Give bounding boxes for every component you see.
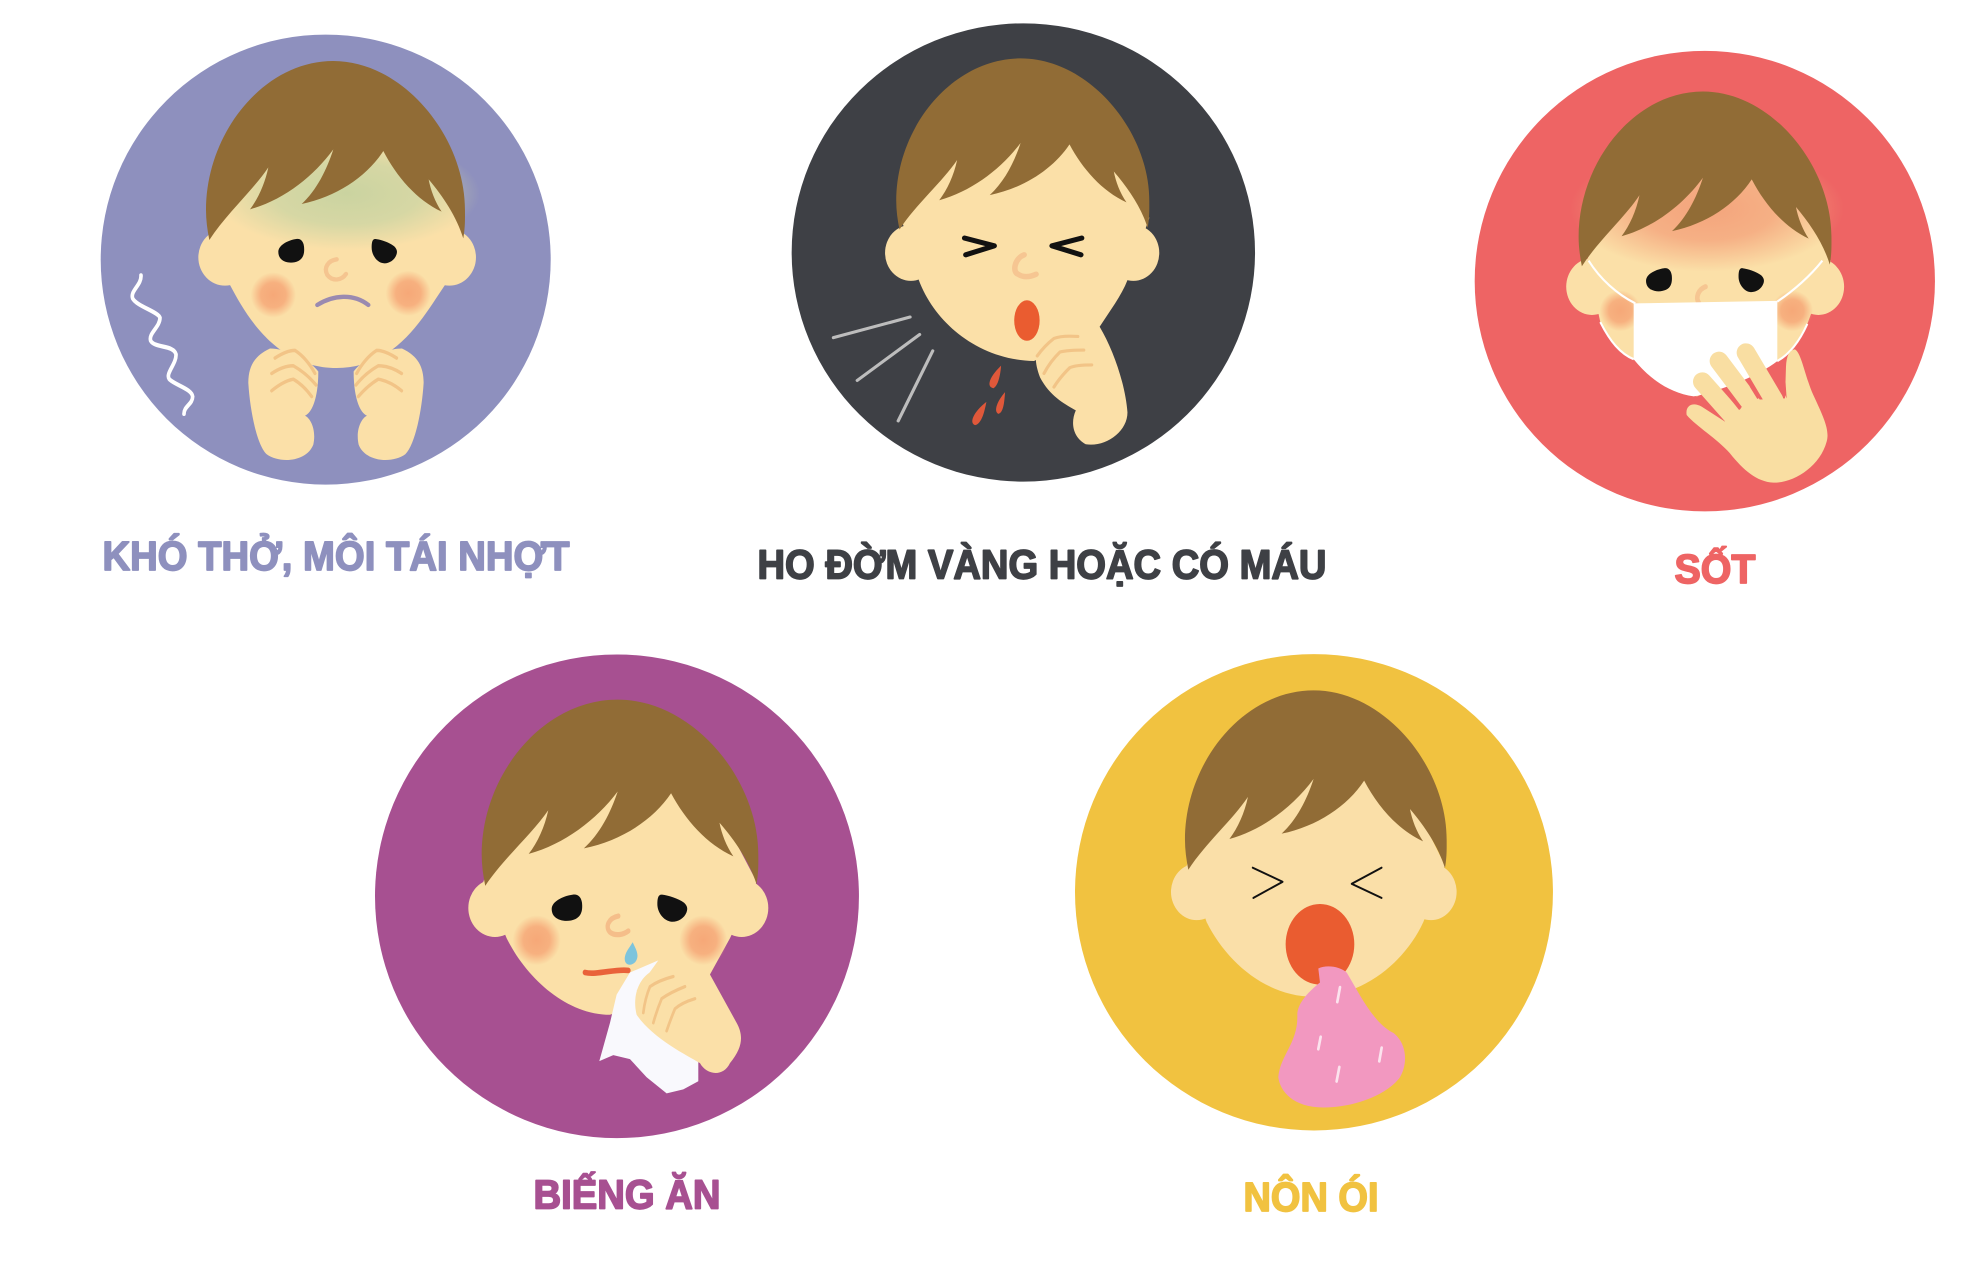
label: HO ĐỜM VÀNG HOẶC CÓ MÁU xyxy=(758,542,1326,588)
label: NÔN ÓI xyxy=(1244,1174,1378,1220)
magenta circle xyxy=(375,655,859,1138)
panel: ho đờm vàng hoặc có máu xyxy=(758,23,1326,587)
cheeks xyxy=(1600,290,1813,331)
hair xyxy=(206,61,465,240)
finger lines xyxy=(643,977,695,1031)
hands and shiver of boy short of breath xyxy=(132,275,424,460)
eyes xyxy=(552,895,687,922)
mask straps xyxy=(1589,261,1822,361)
mouth xyxy=(317,297,368,305)
hair xyxy=(1579,91,1831,266)
fingers xyxy=(1702,353,1774,417)
left hand xyxy=(248,348,318,460)
panel: khó thở, môi tái nhợt xyxy=(101,35,570,579)
panel: nôn ói xyxy=(1075,654,1553,1220)
cheeks xyxy=(251,271,431,318)
eyes xyxy=(278,239,397,263)
label: SỐT xyxy=(1674,546,1756,592)
panel: sốt xyxy=(1475,51,1935,592)
palm xyxy=(1686,349,1828,483)
mouth xyxy=(1014,300,1040,341)
finger gaps xyxy=(1729,386,1758,409)
tissue xyxy=(599,960,698,1093)
blood drops xyxy=(972,366,1005,425)
squeezed eyes xyxy=(965,238,1082,255)
open mouth xyxy=(1286,904,1354,985)
ears xyxy=(468,879,768,937)
ears xyxy=(1171,864,1457,920)
face xyxy=(1587,142,1831,396)
illustration: boy with runny nose xyxy=(375,655,859,1138)
red circle xyxy=(1475,51,1935,511)
illustration: boy coughing xyxy=(792,23,1255,482)
face xyxy=(483,761,757,1015)
nose xyxy=(608,916,628,935)
pale green forehead xyxy=(213,137,480,250)
nose xyxy=(1697,287,1705,303)
shiver line xyxy=(132,275,193,414)
illustration: boy with fever and mask xyxy=(1475,51,1935,511)
snot drop xyxy=(625,942,637,965)
gap beside thumb xyxy=(1773,365,1787,398)
finger lines xyxy=(272,350,402,397)
face xyxy=(210,117,465,368)
cough lines xyxy=(833,317,933,421)
nose xyxy=(326,259,346,280)
dark circle xyxy=(792,23,1255,482)
hair xyxy=(482,700,758,886)
label: BIẾNG ĂN xyxy=(534,1172,720,1218)
right hand xyxy=(354,348,424,460)
vomit xyxy=(1278,966,1405,1107)
cheeks xyxy=(513,915,727,965)
hand xyxy=(1036,327,1127,445)
ears xyxy=(885,225,1159,281)
purple circle xyxy=(101,35,551,485)
hand xyxy=(1686,349,1828,483)
head of boy short of breath xyxy=(198,117,480,368)
face xyxy=(899,117,1149,361)
vomit highlights xyxy=(1318,987,1382,1081)
label: KHÓ THỞ, MÔI TÁI NHỢT xyxy=(102,533,570,579)
finger lines xyxy=(1037,336,1092,387)
mouth xyxy=(585,970,628,973)
flushed forehead xyxy=(1570,145,1844,272)
eyes xyxy=(1646,268,1764,292)
hair xyxy=(896,58,1149,230)
ears xyxy=(1566,258,1844,315)
squeezed eyes xyxy=(1253,868,1382,898)
face xyxy=(1187,761,1445,997)
nose xyxy=(1015,255,1036,277)
illustration: boy vomiting xyxy=(1075,654,1553,1130)
hair xyxy=(1185,690,1447,870)
panel: biếng ăn xyxy=(375,655,859,1218)
yellow circle xyxy=(1075,654,1553,1130)
ears xyxy=(198,229,476,286)
mask xyxy=(1634,301,1777,396)
hand xyxy=(635,968,741,1073)
